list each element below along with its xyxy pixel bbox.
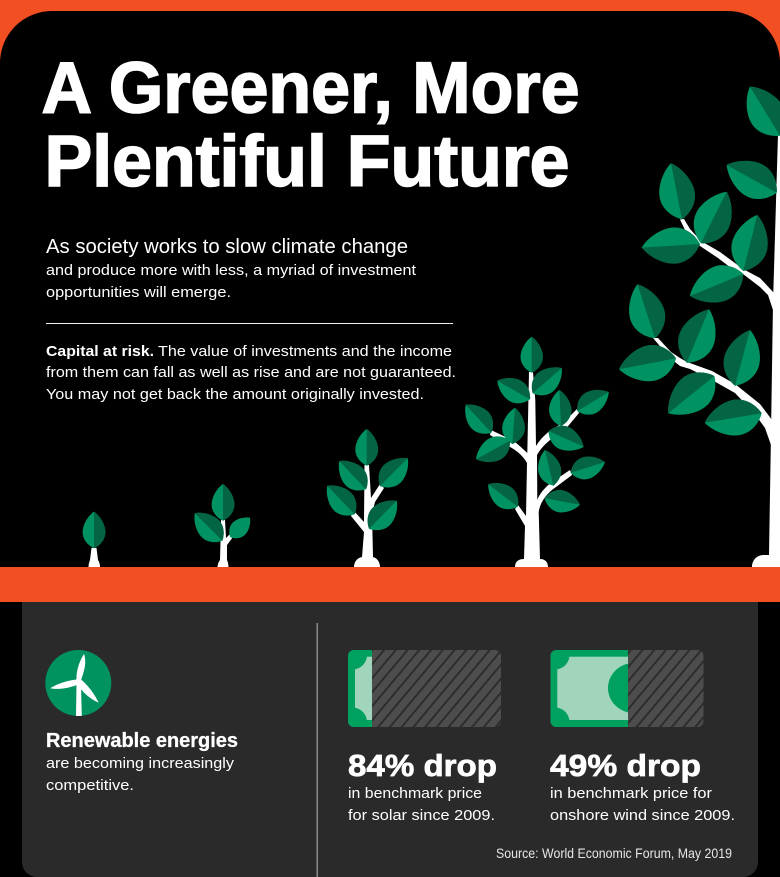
stat: onshore wind: onshore wind since 2009.: [550, 807, 735, 824]
icon: banknote 49% drop: [550, 650, 704, 727]
intro text: and produce more with less, a myriad of investment: [46, 262, 417, 279]
panel: renewable energies: [22, 602, 758, 877]
risk warning: You may not get back the amount originally invested.: [46, 386, 424, 403]
stat: onshore wind: 49% drop: [550, 748, 701, 783]
renewable energies text: Renewable energies: [46, 730, 238, 752]
title: Plentiful Future: [44, 122, 570, 202]
plant stage 5: large tree: [616, 77, 780, 567]
renewable energies text: are becoming increasingly: [46, 755, 235, 772]
plant stage 2: seedling: [186, 484, 256, 567]
plant stage 4: young tree: [457, 337, 615, 567]
intro text: [46, 236, 417, 301]
stat: solar: in benchmark price: [348, 785, 482, 802]
risk warning: [46, 343, 456, 403]
icon: banknote 84% drop: [348, 650, 501, 727]
stat: solar: [348, 748, 497, 824]
risk warning: Capital at risk.: [46, 343, 154, 360]
title: [42, 48, 580, 202]
stat: onshore wind: [550, 748, 735, 824]
intro text: As society works to slow climate change: [46, 236, 408, 258]
risk warning: from them can fall as well as rise and are not guaranteed.: [46, 364, 456, 381]
title: A Greener, More: [42, 48, 580, 128]
risk warning: The value of investments and the income: [158, 343, 452, 360]
renewable energies text: [46, 730, 238, 794]
renewable energies text: competitive.: [46, 777, 134, 794]
plant stage 3: sapling: [318, 429, 416, 567]
intro text: opportunities will emerge.: [46, 284, 231, 301]
stat: solar: 84% drop: [348, 748, 497, 783]
stat: onshore wind: in benchmark price for: [550, 785, 712, 802]
source: Source: World Economic Forum, May 2019: [496, 845, 732, 861]
stat: solar: for solar since 2009.: [348, 807, 495, 824]
icon: wind turbine: [45, 650, 111, 717]
ground strip: [0, 567, 780, 602]
plant stage 1: sprout: [83, 512, 105, 567]
